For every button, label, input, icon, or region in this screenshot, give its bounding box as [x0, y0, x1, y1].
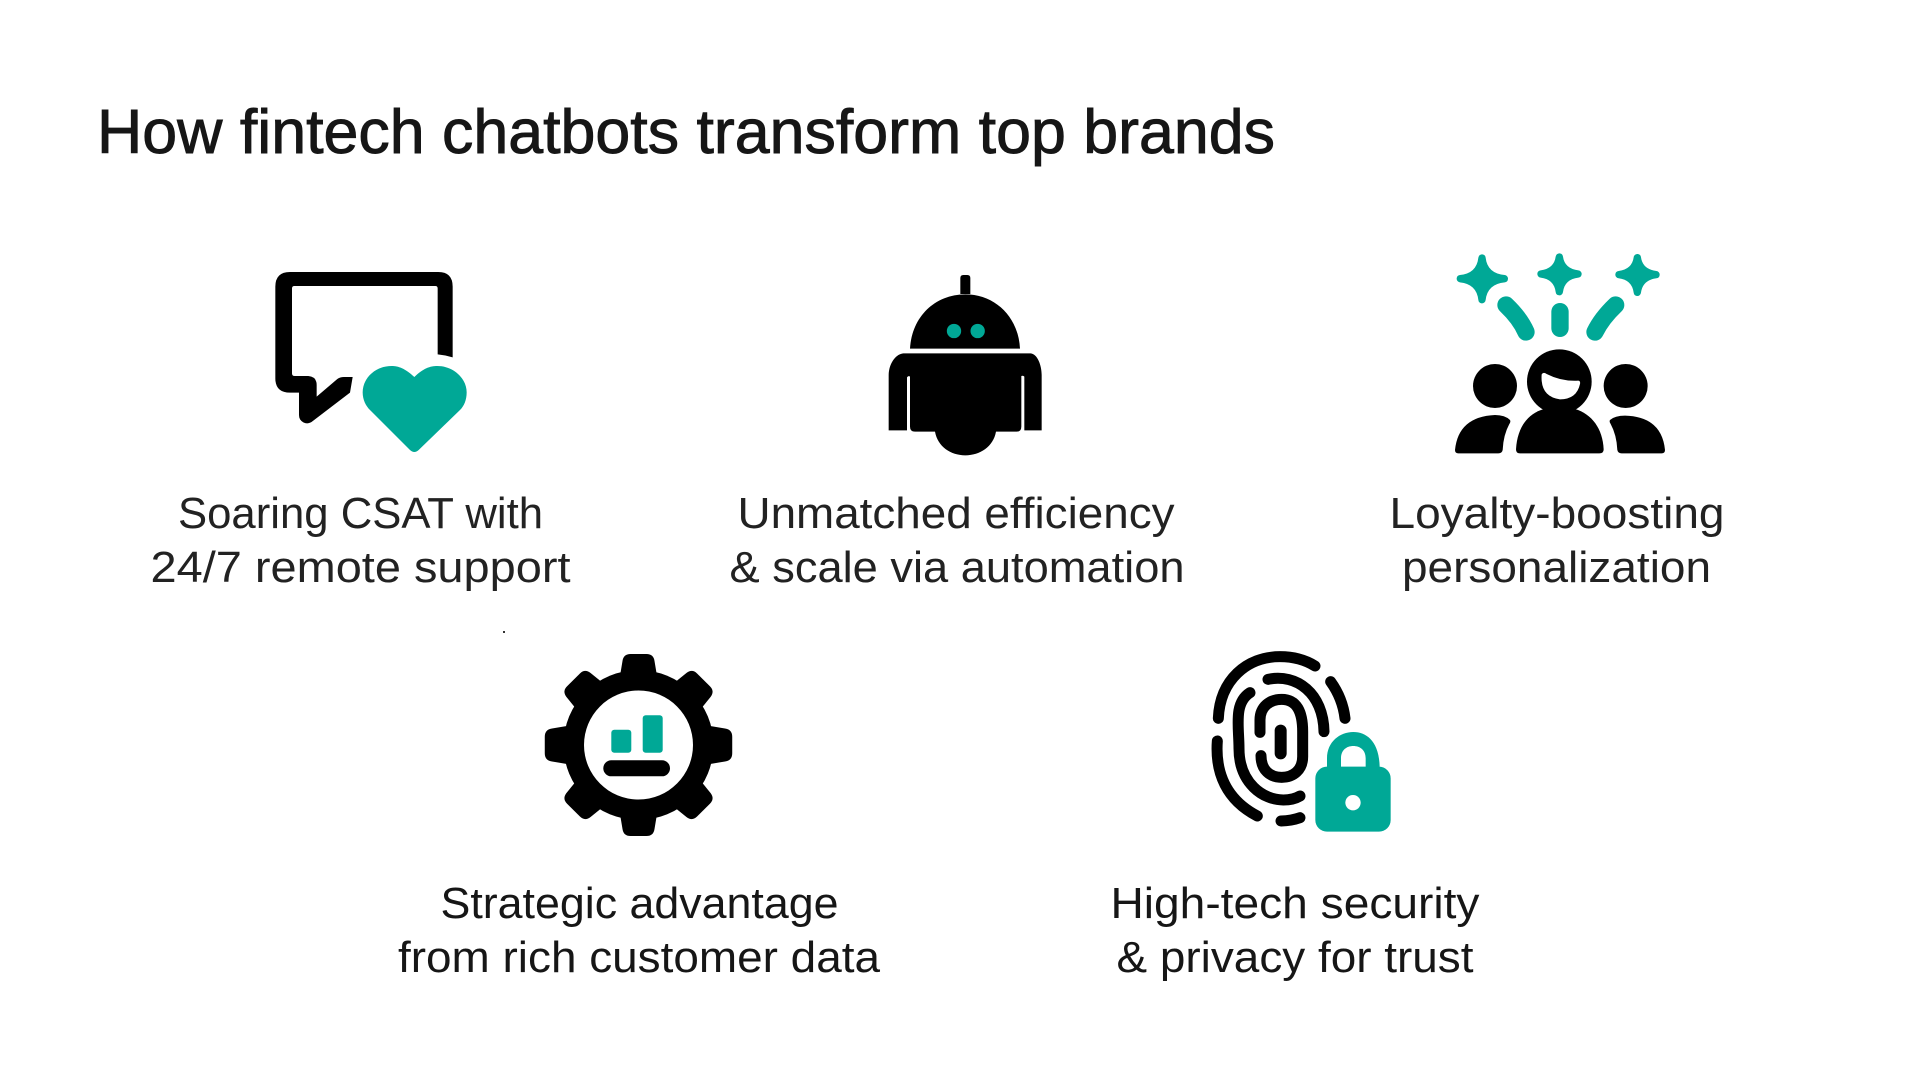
panel: CSAT support	[150, 272, 570, 592]
label: CSAT support	[150, 489, 570, 592]
panel: efficiency and scale	[730, 275, 1184, 592]
panel: security and privacy	[1110, 657, 1480, 982]
label: customer data: Strategic advantage	[440, 879, 838, 928]
label: customer data: from rich customer data	[398, 933, 881, 982]
icon: celebrating people with sparkles	[1455, 257, 1665, 453]
panel: personalization	[1390, 257, 1724, 592]
panel: customer data	[398, 654, 881, 982]
icon: chat bubble with heart	[275, 272, 467, 452]
label: CSAT support: Soaring CSAT with	[178, 489, 543, 538]
label: personalization: personalization	[1402, 543, 1711, 592]
icon: gear with bar chart	[545, 654, 732, 836]
title: How fintech chatbots transform top brands	[97, 98, 1275, 167]
label: efficiency and scale	[730, 489, 1184, 592]
icon: robot	[889, 275, 1042, 455]
label: security and privacy	[1110, 879, 1480, 982]
label: security and privacy: & privacy for trust	[1116, 933, 1474, 982]
label: efficiency and scale: & scale via automation	[730, 543, 1184, 592]
label: security and privacy: High-tech security	[1110, 879, 1480, 928]
label: CSAT support: 24/7 remote support	[150, 543, 570, 592]
label: customer data	[398, 879, 881, 982]
label: efficiency and scale: Unmatched efficiency	[738, 489, 1174, 538]
icon: fingerprint with padlock	[1217, 657, 1391, 832]
label: personalization: Loyalty-boosting	[1390, 489, 1724, 538]
label: personalization	[1390, 489, 1724, 592]
